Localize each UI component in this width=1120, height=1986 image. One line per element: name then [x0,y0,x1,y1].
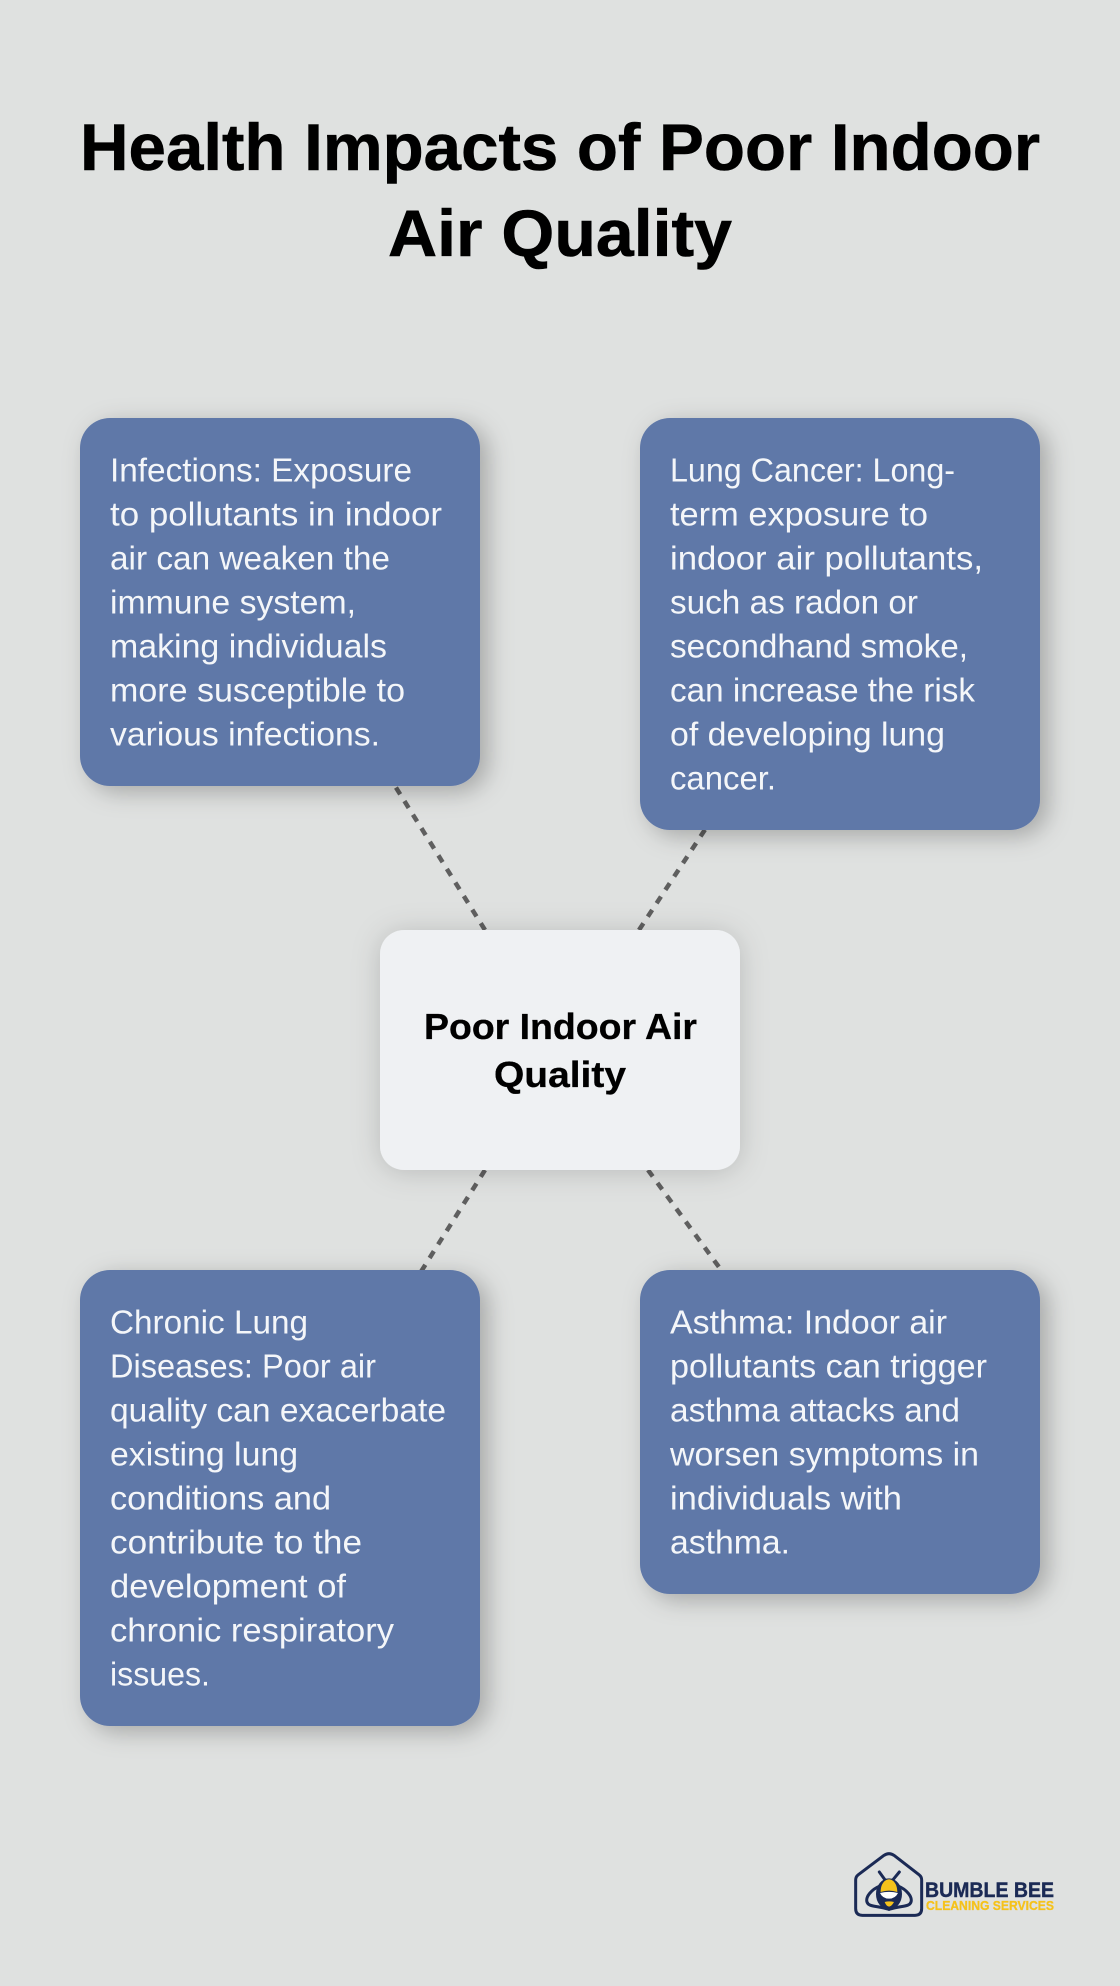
panel: chronic lung diseases: quality can exacerbate [110,1391,446,1428]
connector: infections to centre [390,778,485,930]
panel: infections: to pollutants in indoor [110,495,442,532]
panel: lung cancer: term exposure to [670,495,928,532]
logo: Bumble Bee Cleaning Services [856,1854,1054,1915]
panel: chronic lung diseases: existing lung [110,1435,298,1472]
panel: infections: immune system, [110,583,356,620]
panel: centre topic: Quality [494,1054,626,1095]
panel: asthma: pollutants can trigger [670,1347,987,1384]
panel: infections: making individuals [110,627,387,664]
connector: lung cancer to centre [639,822,710,930]
logo wordmark: BUMBLE BEE [925,1879,1054,1902]
panel: lung cancer: can increase the risk [670,671,976,708]
panel: chronic lung diseases: contribute to the [110,1523,362,1560]
panel: chronic lung diseases: chronic respiratory [110,1611,395,1648]
panel: asthma: asthma. [670,1523,790,1560]
panel: chronic lung diseases [80,1270,480,1726]
panel: asthma: asthma attacks and [670,1391,960,1428]
panel: infections: various infections. [110,715,380,752]
panel: infections [80,418,480,786]
panel: lung cancer: of developing lung [670,715,945,752]
panel: lung cancer: Lung Cancer: Long- [670,451,955,488]
panel: lung cancer: cancer. [670,759,776,796]
panel: asthma: Asthma: Indoor air [670,1303,947,1340]
icon: bee in house [856,1854,922,1915]
panel: infections: more susceptible to [110,671,405,708]
panel: centre topic: Poor Indoor Air [424,1006,697,1047]
panel: chronic lung diseases: conditions and [110,1479,331,1516]
panel: lung cancer [640,418,1040,830]
title: Health Impacts of Poor Indoor [80,110,1040,184]
panel: asthma: worsen symptoms in [669,1435,979,1472]
panel: centre topic [380,930,740,1170]
title [80,110,1040,270]
panel: infections: Infections: Exposure [110,451,412,488]
connector: asthma to centre [648,1170,727,1278]
panel: lung cancer: secondhand smoke, [670,627,968,664]
panel: infections: air can weaken the [110,539,390,576]
panel: chronic lung diseases: development of [110,1567,347,1604]
logo tagline: CLEANING SERVICES [926,1898,1054,1913]
panel: chronic lung diseases: issues. [110,1655,210,1692]
panel: chronic lung diseases: Chronic Lung [110,1303,308,1340]
connector: chronic lung diseases to centre [417,1170,485,1278]
title: Air Quality [388,196,732,270]
panel: lung cancer: such as radon or [670,583,918,620]
panel: chronic lung diseases: Diseases: Poor air [110,1347,376,1384]
panel: asthma: individuals with [670,1479,902,1516]
panel: lung cancer: indoor air pollutants, [670,539,983,576]
panel: asthma [640,1270,1040,1594]
